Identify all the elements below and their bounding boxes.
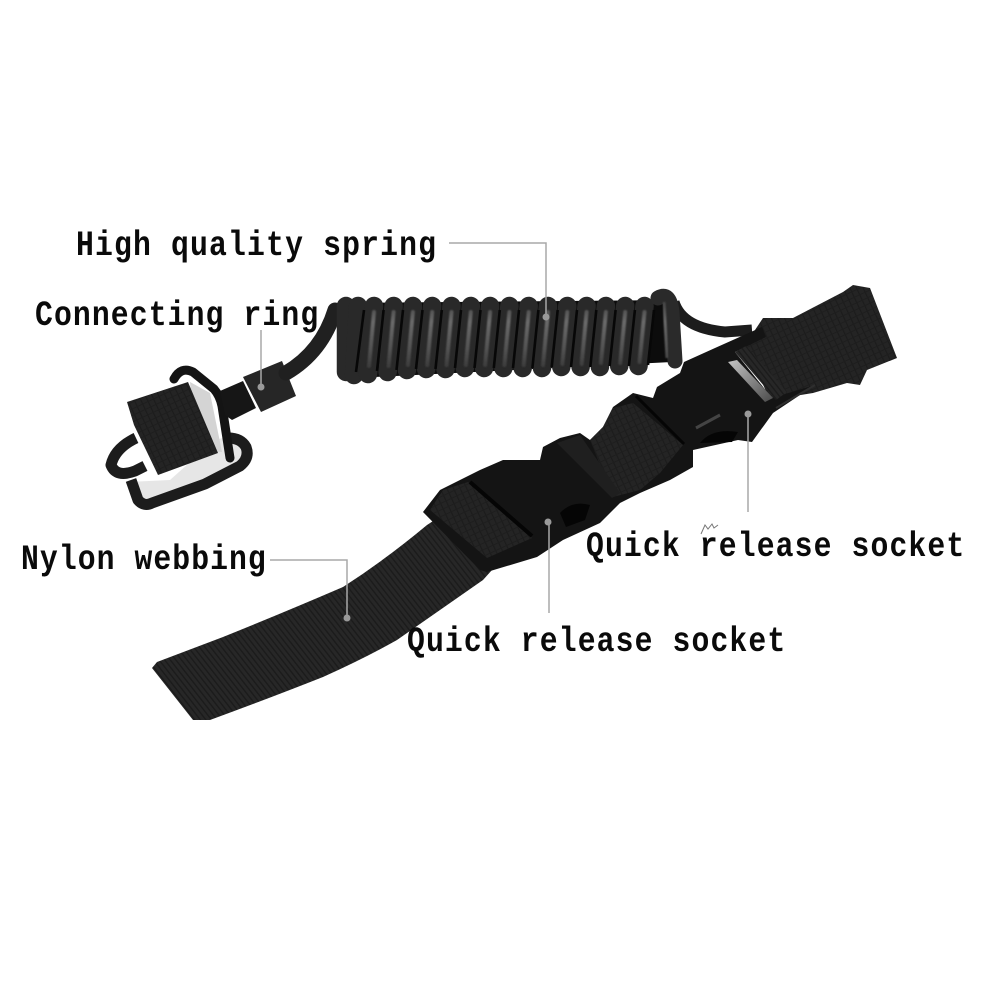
last coil loop [658,296,675,361]
label: Connecting ring: Connecting ring [35,296,318,336]
triangle ring [174,370,230,458]
buckles and centre webbing silhouette [423,327,815,572]
connector neck and collar [220,361,296,420]
label: Nylon webbing: Nylon webbing [21,540,266,580]
webbing tab [127,382,218,475]
upper strap [745,285,897,400]
spring coil [345,300,672,378]
label: High quality spring: High quality spring [76,226,436,266]
label: High quality spring [76,226,550,320]
centre webbing [590,403,683,497]
lower strap tail: nylon webbing [152,510,510,720]
label: Nylon webbing [21,540,350,622]
label: Quick release socket (lower) [407,518,785,662]
left tube [286,310,335,373]
lower buckle details [430,435,620,558]
label: Quick release socket (upper) [586,410,964,567]
label: Quick release socket (upper): Quick release socket [586,527,964,567]
upper buckle details [636,346,815,444]
label: Connecting ring [35,296,318,390]
label: Quick release socket (lower): Quick release socket [407,622,785,662]
product: sling [111,285,897,720]
right tube [674,302,752,332]
lanyard cord loops [111,436,248,507]
